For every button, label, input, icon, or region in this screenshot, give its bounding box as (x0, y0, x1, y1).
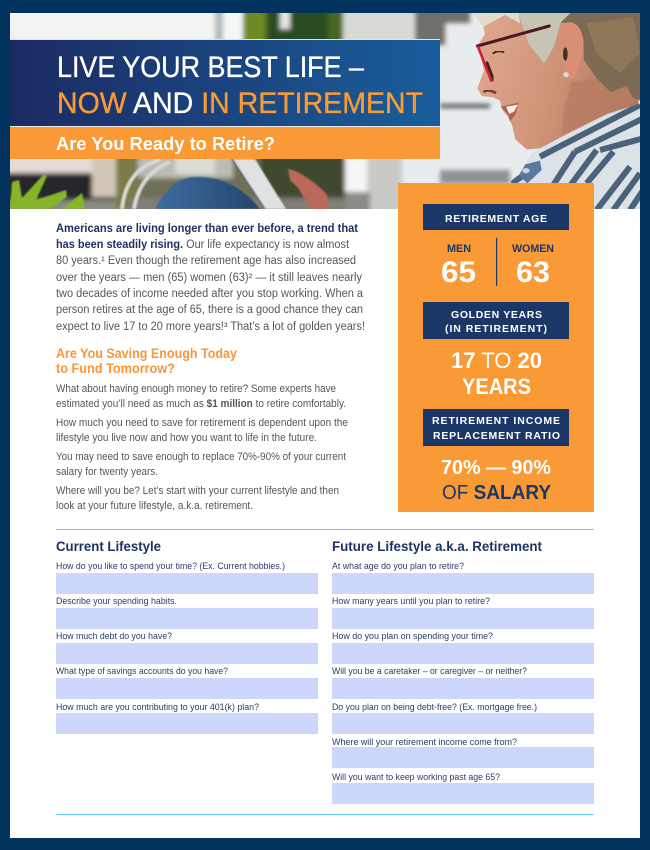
question: retire age (332, 560, 594, 594)
retirement age header (423, 204, 569, 230)
earring (563, 72, 569, 77)
neck shadow (562, 78, 637, 135)
golden years header (423, 302, 569, 339)
saving paragraphs (56, 383, 348, 512)
intro paragraph (56, 223, 365, 333)
question: 401k: How much are you contributing to your 401(k) plan? (56, 701, 259, 712)
intro paragraph: 80 years.¹ Even though the retirement age has also increased (56, 255, 356, 267)
subtitle: Are You Ready to Retire? (56, 134, 275, 154)
saving paragraphs: What about having enough money to retire? Some experts have (56, 383, 336, 395)
ear (559, 22, 583, 79)
retirement age header: RETIREMENT AGE (445, 213, 547, 225)
question: years until: How many years until you plan to retire? (332, 595, 490, 606)
question: debt: How much debt do you have? (56, 630, 172, 641)
question: time (56, 560, 318, 594)
title banner (10, 39, 440, 159)
panel: current lifestyle form (56, 539, 318, 734)
golden years value: YEARS (462, 374, 531, 399)
section heading: saving enough: to Fund Tomorrow? (56, 361, 175, 376)
men stat: 65 (441, 256, 476, 289)
question: debt free (332, 701, 594, 734)
heading: future lifestyle: Future Lifestyle a.k.a. Retirement (332, 539, 542, 554)
intro paragraph: expect to live 17 to 20 more years!³ That’s a lot of golden years! (56, 321, 365, 333)
question: income source: Where will your retirement income come from? (332, 736, 517, 747)
hand (288, 169, 329, 209)
face and neck (472, 10, 640, 149)
golden years header: (IN RETIREMENT) (445, 323, 547, 335)
smile (501, 103, 519, 122)
shirt (509, 103, 640, 209)
income ratio value: OF SALARY (442, 481, 551, 504)
question: 401k (56, 701, 318, 734)
saving paragraphs: How much you need to save for retirement is dependent upon the (56, 417, 348, 429)
question: caretaker (332, 665, 594, 699)
intro paragraph: Americans are living longer than ever before, a trend that (56, 223, 358, 235)
panel: retirement stats (398, 183, 594, 512)
section heading: saving enough (56, 346, 237, 376)
question: keep working (332, 771, 594, 804)
men stat (441, 243, 476, 289)
woman portrait (470, 10, 647, 213)
question: caretaker: Will you be a caretaker – or caregiver – or neither? (332, 665, 527, 676)
income ratio value (441, 456, 551, 504)
section heading: saving enough: Are You Saving Enough Today (56, 346, 237, 361)
arcs behind knee (122, 160, 170, 209)
heading: current lifestyle: Current Lifestyle (56, 539, 161, 554)
question: savings (56, 665, 318, 699)
tablet (232, 159, 286, 209)
title line 1: LIVE YOUR BEST LIFE – (57, 51, 364, 84)
question: income source (332, 736, 594, 768)
women stat (512, 243, 554, 289)
plant leaves (10, 174, 85, 209)
question: years until (332, 595, 594, 629)
intro paragraph: two decades of income needed after you stop working. When a (56, 288, 364, 300)
golden years value (451, 348, 542, 399)
saving paragraphs: You may need to save enough to replace 70%-90% of your current (56, 451, 346, 463)
question: keep working: Will you want to keep working past age 65? (332, 771, 500, 782)
income ratio header: REPLACEMENT RATIO (433, 430, 560, 442)
panel: future lifestyle form (332, 539, 594, 804)
hair (472, 13, 640, 100)
income ratio header: RETIREMENT INCOME (432, 415, 560, 427)
saving paragraphs: Where will you be? Let’s start with your current lifestyle and then (56, 485, 339, 497)
intro paragraph: over the years — men (65) women (63)² — it still leaves nearly (56, 272, 362, 284)
question: time: How do you like to spend your time? (Ex. Current hobbies.) (56, 560, 285, 571)
saving paragraphs: salary for twenty years. (56, 466, 158, 478)
intro paragraph: has been steadily rising. Our life expectancy is now almost (56, 239, 350, 251)
question: spending time: How do you plan on spending your time? (332, 630, 493, 641)
income ratio header (423, 409, 569, 446)
eye and glasses (477, 26, 549, 81)
question: debt free: Do you plan on being debt-free? (Ex. mortgage free.) (332, 701, 537, 712)
jeans knee (155, 177, 260, 209)
saving paragraphs: lifestyle you live now and how you want to life in the future. (56, 432, 317, 444)
income ratio value: 70% — 90% (441, 456, 551, 479)
title line 2: NOW AND IN RETIREMENT (57, 87, 423, 120)
question: savings: What type of savings accounts do you have? (56, 665, 228, 676)
golden years value: 17 TO 20 (451, 348, 542, 373)
shirt button (522, 168, 530, 173)
saving paragraphs: look at your future lifestyle, a.k.a. retirement. (56, 500, 253, 512)
saving paragraphs: estimated you’ll need as much as $1 million to retire comfortably. (56, 398, 346, 410)
golden years header: GOLDEN YEARS (451, 309, 542, 321)
nostril (483, 91, 496, 93)
intro paragraph: person retires at the age of 65, there is a good chance they can (56, 304, 363, 316)
men stat: MEN (447, 243, 471, 255)
women stat: 63 (516, 256, 550, 289)
question: spending: Describe your spending habits. (56, 595, 177, 606)
question: spending time (332, 630, 594, 664)
women stat: WOMEN (512, 243, 554, 255)
question: debt (56, 630, 318, 664)
hero photo: woman with tablet (10, 13, 640, 209)
subtitle strip (10, 127, 440, 159)
question: spending (56, 595, 318, 629)
question: retire age: At what age do you plan to retire? (332, 560, 464, 571)
